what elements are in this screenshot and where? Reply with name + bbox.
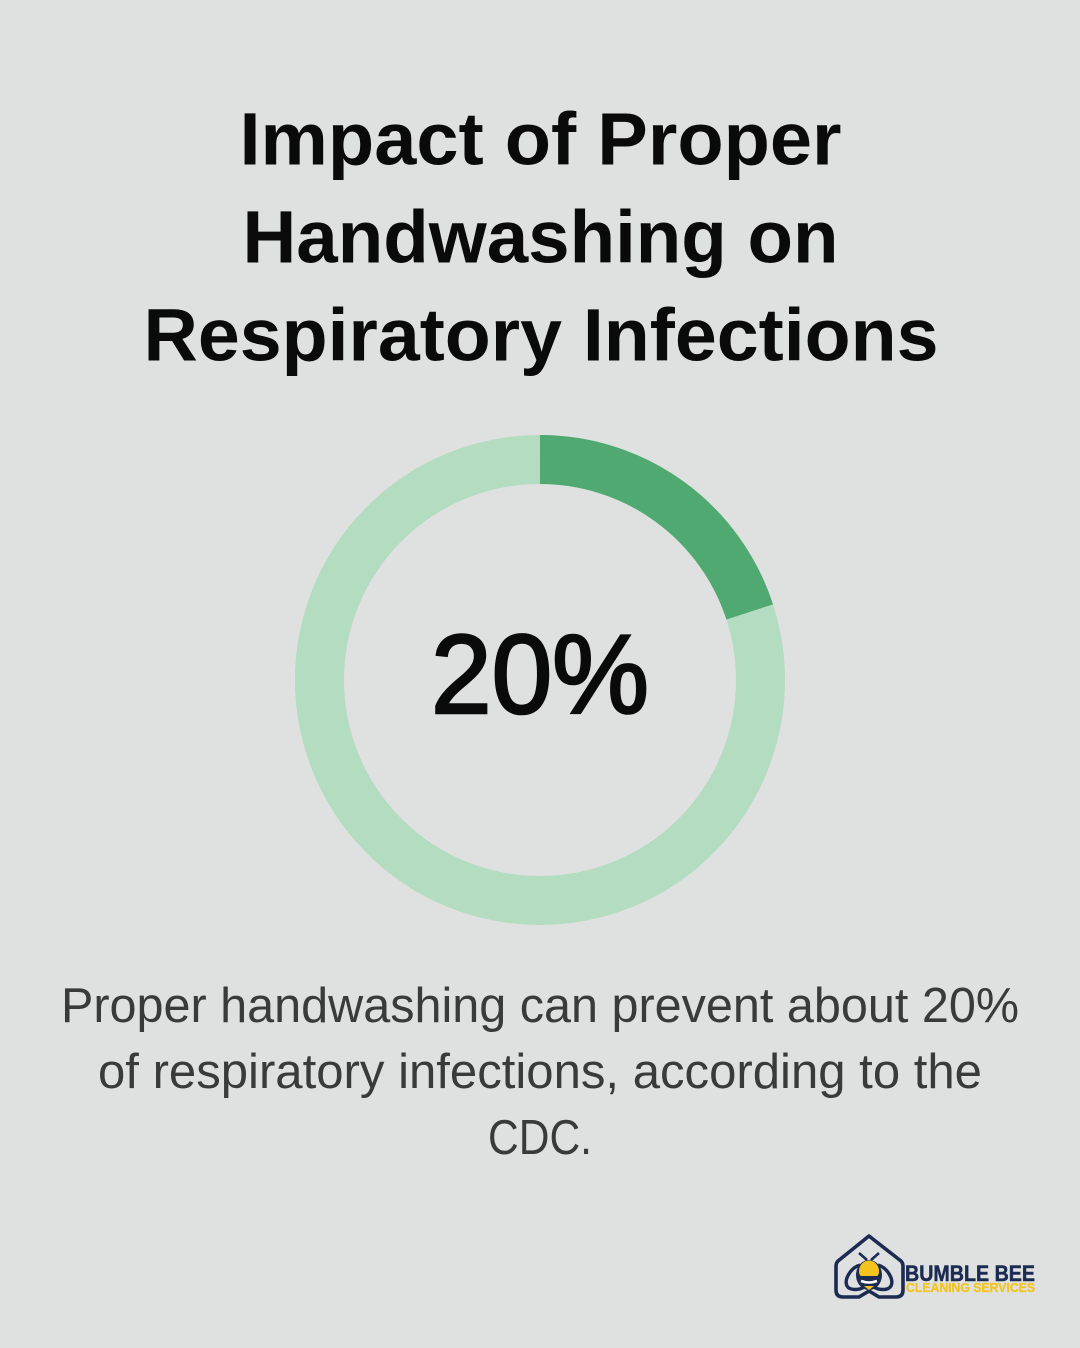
logo name: BUMBLE BEE xyxy=(905,1261,1035,1286)
logo tagline: CLEANING SERVICES xyxy=(906,1280,1035,1295)
logo: Bumble Bee Cleaning Services xyxy=(836,1236,1035,1297)
description text: Proper handwashing can prevent about 20% xyxy=(61,979,1019,1033)
title: Respiratory Infections xyxy=(144,294,939,376)
description text: of respiratory infections, according to the xyxy=(98,1045,982,1099)
title: Impact of Proper xyxy=(240,98,842,180)
center value: 20% xyxy=(431,612,649,737)
description text: CDC. xyxy=(488,1111,592,1165)
title: Handwashing on xyxy=(242,196,838,278)
icon: bee xyxy=(846,1253,892,1290)
icon: house outline xyxy=(836,1236,903,1297)
donut track xyxy=(320,460,760,900)
description text xyxy=(61,979,1019,1165)
title xyxy=(144,98,939,376)
donut chart xyxy=(320,460,760,900)
donut value segment: 20% xyxy=(540,460,750,612)
